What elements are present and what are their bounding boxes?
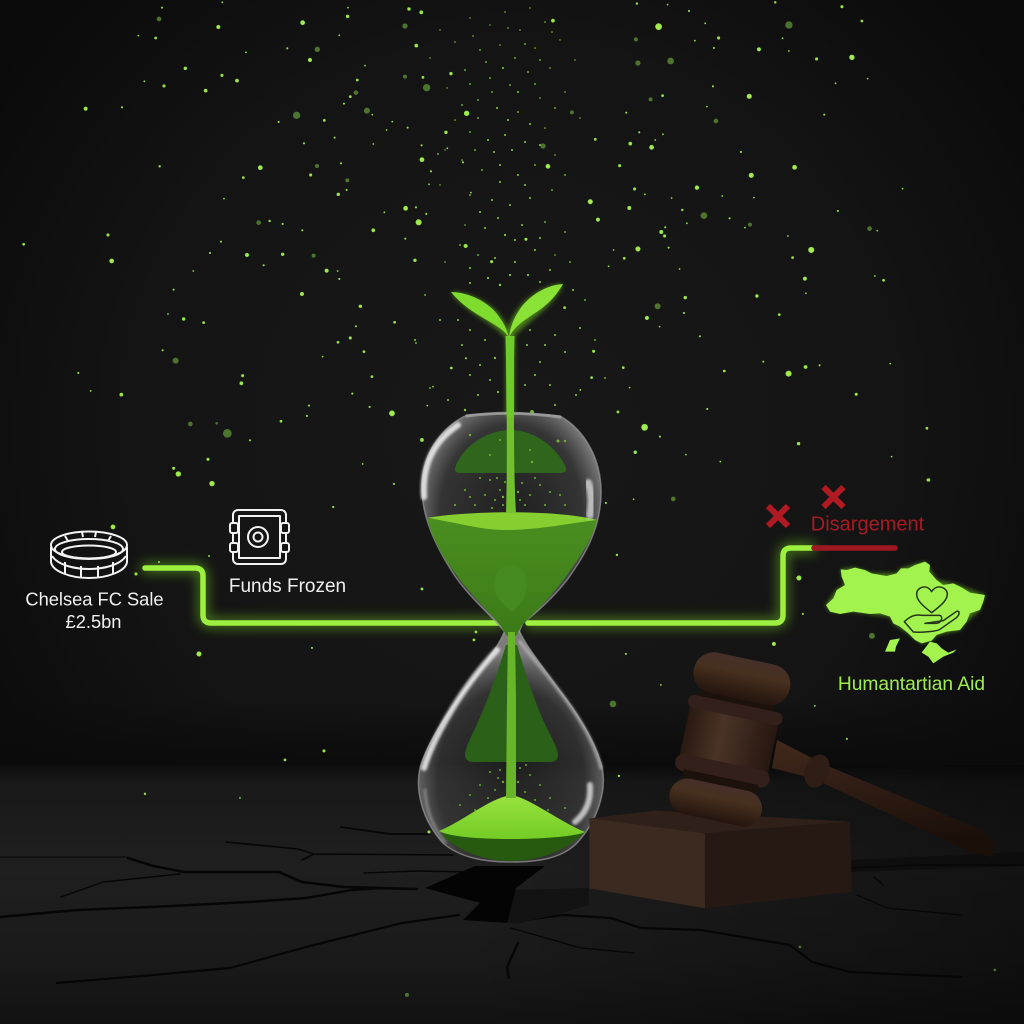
icon: red cross right [824, 487, 844, 507]
crust [507, 888, 589, 923]
glass highlights [424, 413, 601, 842]
label: Humantartian Aid: Humantartian Aid [838, 674, 985, 695]
gavel [589, 649, 1024, 908]
red blocked line segment [814, 545, 895, 551]
Ukraine map with aid icon [826, 562, 985, 663]
head [664, 649, 794, 830]
sprout [451, 284, 563, 415]
icon: red cross left [768, 506, 788, 526]
left leaf [451, 292, 509, 338]
label: Funds Frozen: Funds Frozen [229, 576, 346, 597]
label: Chelsea FC Sale: £2.5bn [66, 611, 121, 632]
stem [506, 336, 514, 415]
dark green dome upper [455, 430, 566, 473]
handle [772, 740, 995, 857]
sound block [589, 811, 852, 908]
crack hole [425, 866, 545, 923]
top sand surface [427, 512, 597, 530]
dark green bell lower [465, 645, 558, 762]
icon: heart in hand [904, 587, 959, 632]
map outline [826, 562, 985, 663]
green line path [145, 548, 812, 623]
dust lower [459, 764, 566, 811]
bottom sand mound [439, 795, 585, 839]
right leaf [509, 284, 563, 338]
sand streams [506, 632, 516, 798]
icon: safe [230, 510, 289, 564]
top sand [427, 519, 597, 636]
shadow [850, 852, 1024, 872]
floor with cracks [0, 700, 1024, 1024]
flow line with glow [145, 548, 895, 623]
falling dust in upper bulb [454, 410, 566, 509]
label: Chelsea FC Sale: Chelsea FC Sale [25, 588, 164, 610]
glass bottom bulb [418, 630, 603, 862]
hourglass [418, 400, 603, 862]
glass top bulb [422, 413, 601, 632]
particles: falling dust near top centre [414, 7, 606, 411]
bottom sand base [440, 832, 585, 861]
ghost shape in sand [494, 565, 527, 612]
icon: stadium [51, 532, 127, 578]
label: Disargement: Disargement [811, 514, 925, 536]
